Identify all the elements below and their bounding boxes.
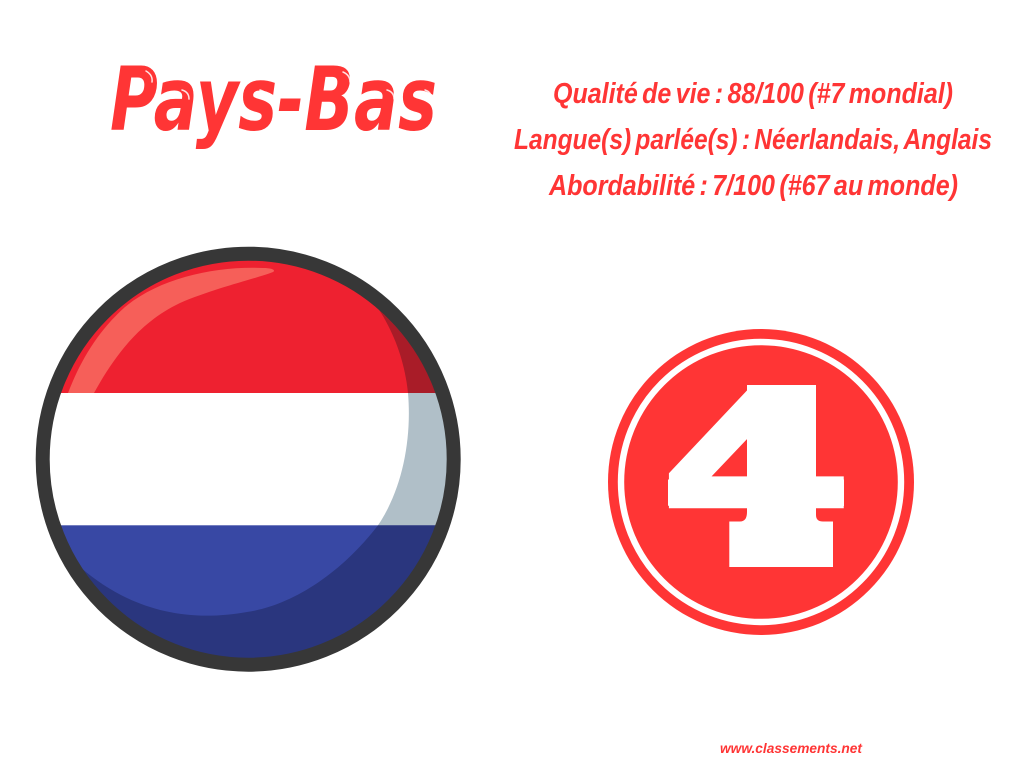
title gloss highlights <box>146 71 431 99</box>
quality of life line: Qualité de vie : 88/100 (#7 mondial) <box>553 78 953 110</box>
digit stem, crossbar and foot <box>668 385 844 567</box>
title: Pays-Bas <box>110 48 437 151</box>
footer: website url: www.classements.net <box>720 740 863 756</box>
badge: rank number 4 <box>608 329 914 635</box>
icon: Netherlands flag button <box>30 240 470 680</box>
rank digit: 4 <box>660 349 853 579</box>
affordability line: Abordabilité : 7/100 (#67 au monde) <box>548 170 958 202</box>
text block: country facts <box>514 78 992 202</box>
